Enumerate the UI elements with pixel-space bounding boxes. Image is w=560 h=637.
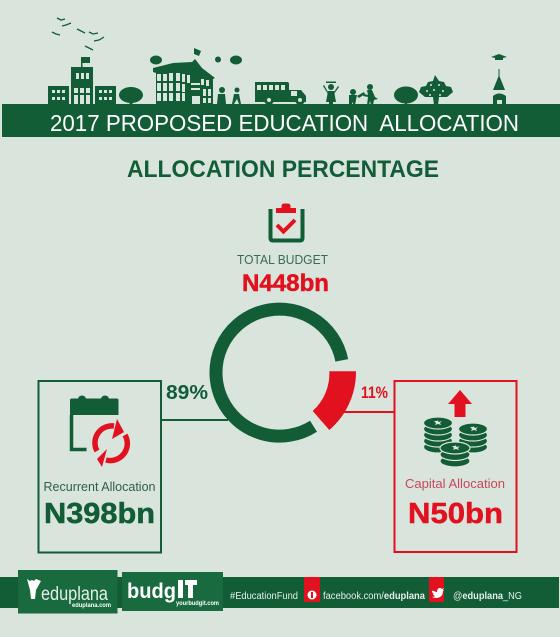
icon: coin stacks bbox=[424, 417, 488, 467]
icon: facebook bbox=[304, 577, 320, 602]
heading: allocation percentage: ALLOCATION PERCENTAGE bbox=[127, 156, 439, 183]
icon: tower with graduation cap bbox=[491, 54, 507, 110]
donut segment: capital 11% bbox=[313, 371, 356, 430]
banner title: 2017 PROPOSED EDUCATION ALLOCATION bbox=[50, 110, 519, 136]
text: capital allocation value: N50bn bbox=[408, 498, 503, 530]
percentage: 89%: 89% bbox=[166, 382, 208, 404]
connector line: recurrent bbox=[161, 419, 228, 421]
icon: school bus bbox=[255, 82, 306, 105]
donut chart bbox=[216, 309, 356, 436]
illustration: city skyline bbox=[48, 18, 507, 110]
icon: clipboard with check bbox=[270, 204, 302, 240]
percentage: 11%: 11% bbox=[361, 383, 388, 402]
icon: round tree bbox=[394, 86, 418, 105]
icon: large school building bbox=[150, 48, 242, 105]
icon: calendar with refresh arrows bbox=[70, 396, 127, 467]
connector line: capital bbox=[341, 411, 394, 413]
text: total budget value: N448bn bbox=[242, 270, 329, 297]
logo: budgit: budg bbox=[127, 580, 176, 603]
text: twitter handle: @eduplana_NG bbox=[453, 591, 522, 602]
logo: eduplana: eduplana.com bbox=[72, 603, 111, 609]
text: hashtag: #EducationFund bbox=[230, 591, 298, 602]
icon: birds bbox=[52, 18, 104, 50]
text: facebook address: facebook.com/eduplana bbox=[323, 591, 425, 602]
icon: graduate figure bbox=[323, 82, 339, 105]
panel: recurrent allocation bbox=[38, 381, 228, 552]
text: total budget label: TOTAL BUDGET bbox=[237, 252, 328, 267]
icon: leafy tree bbox=[419, 75, 453, 105]
logo: budgit: yourbudgit.com bbox=[176, 601, 219, 607]
logo: eduplana bbox=[18, 570, 118, 614]
text: recurrent allocation label: Recurrent Allocation bbox=[44, 480, 156, 494]
icon: child and parent bbox=[348, 84, 378, 105]
icon: up arrow bbox=[448, 390, 472, 417]
donut segment: recurrent 89% bbox=[216, 309, 342, 436]
icon: left school building bbox=[48, 57, 116, 105]
icon: left tree bbox=[119, 87, 143, 105]
icon: twitter bbox=[429, 577, 444, 602]
text: capital allocation label: Capital Allocation bbox=[405, 477, 505, 491]
text: recurrent allocation value: N398bn bbox=[44, 498, 155, 530]
banner bbox=[2, 104, 560, 137]
panel: capital allocation bbox=[341, 381, 516, 552]
icon: children walking bbox=[217, 87, 241, 104]
footer band bbox=[0, 570, 559, 614]
logo: budgit bbox=[122, 572, 223, 611]
logo: eduplana: eduplana bbox=[41, 584, 108, 605]
